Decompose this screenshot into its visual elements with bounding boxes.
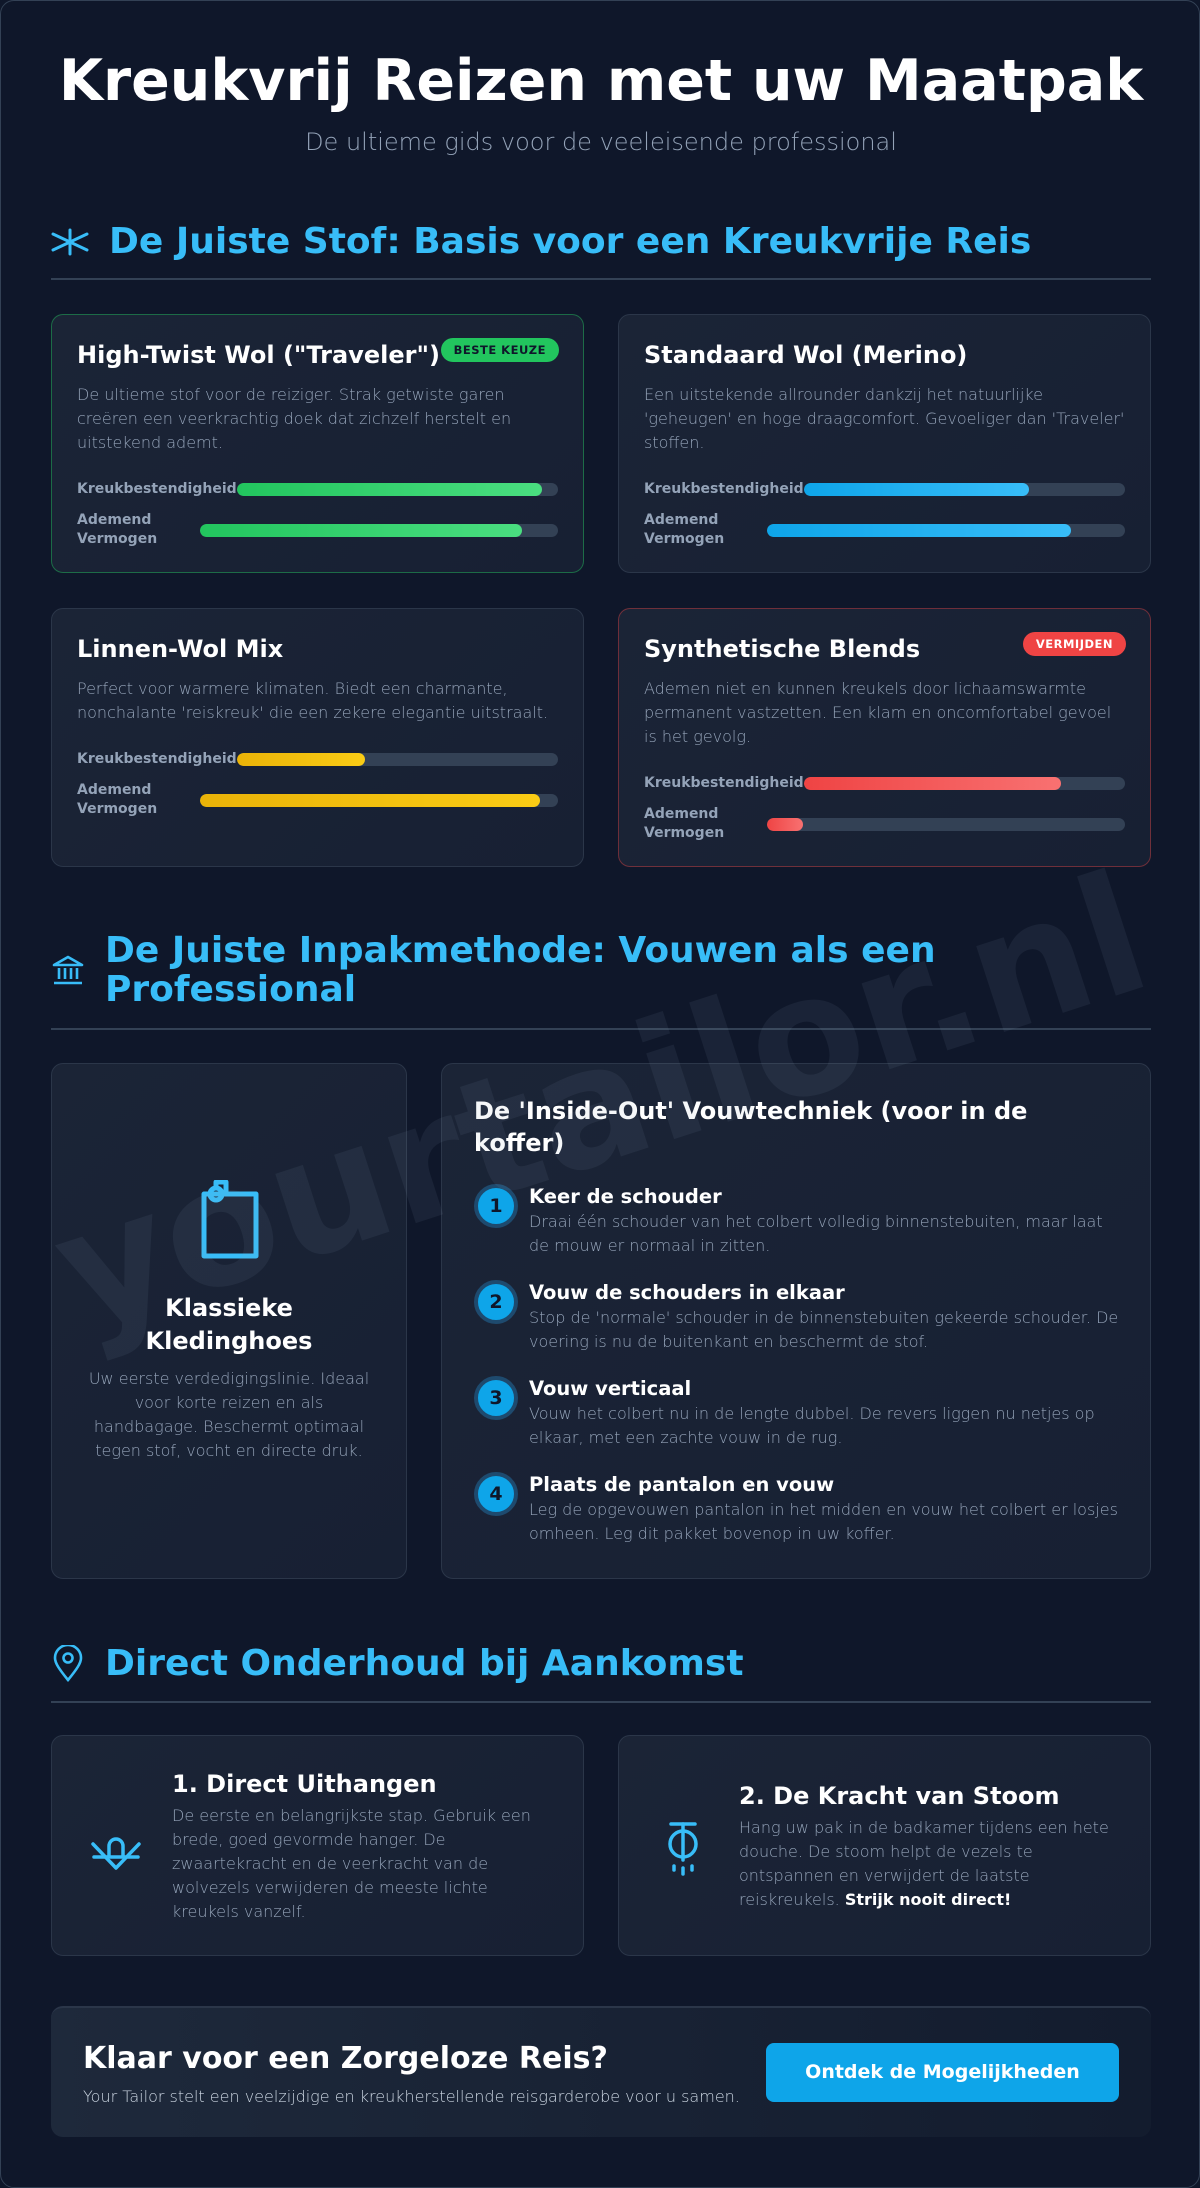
panel text [89, 1369, 369, 1460]
card title: 2. De Kracht van Stoom [739, 1782, 1060, 1810]
step 3: Vouw verticaal [529, 1377, 691, 1400]
card: hang up [51, 1735, 584, 1956]
panel title: De 'Inside-Out' Vouwtechniek (voor in de koffer) [474, 1097, 1027, 1157]
bar chart: Ademend Vermogen [77, 782, 157, 817]
card text: Ademen niet en kunnen kreukels door lichaamswarmte permanent vastzetten. Een klam en oncomfortabel gevoel is het gevolg. [644, 679, 1111, 746]
bar chart: Kreukbestendigheid [644, 775, 804, 791]
CTA banner [51, 2006, 1151, 2137]
panel text: tegen stof, vocht en directe druk. [95, 1441, 363, 1460]
section heading: arrival: Direct Onderhoud bij Aankomst [105, 1643, 744, 1684]
watermark: yourtailor.nl [34, 837, 1168, 1369]
step 3: Vouw het colbert nu in de lengte dubbel. De revers liggen nu netjes op [529, 1404, 1095, 1423]
title: Kreukvrij Reizen met uw Maatpak [59, 48, 1143, 114]
card title: High-Twist Wol ("Traveler") [77, 341, 440, 369]
bar chart [77, 751, 558, 817]
card: linen-wool [51, 608, 584, 867]
card text: Hang uw pak in de badkamer tijdens een hete douche. De stoom helpt de vezels te ontspannen en verwijdert de laatste reiskreukels. Strijk nooit direct! [739, 1818, 1109, 1909]
step 1: de mouw er normaal in zitten. [529, 1236, 770, 1255]
step 2: Vouw de schouders in elkaar [529, 1281, 845, 1304]
badge: vermijden [1023, 632, 1126, 656]
panel: inside-out technique [441, 1063, 1151, 1579]
step 2 [474, 1280, 1118, 1351]
section heading: packing [52, 930, 936, 1010]
bar chart [77, 481, 558, 547]
card title: Standaard Wol (Merino) [644, 341, 967, 369]
card: steam [618, 1735, 1151, 1956]
section heading: packing: De Juiste Inpakmethode: Vouwen als een [105, 930, 936, 971]
badge: beste keuze [441, 338, 559, 362]
subtitle: De ultieme gids voor de veeleisende professional [305, 128, 897, 156]
step 3: elkaar, met een zachte vouw in de rug. [529, 1428, 842, 1447]
step 2: 2 [489, 1291, 503, 1313]
card text: Een uitstekende allrounder dankzij het natuurlijke 'geheugen' en hoge draagcomfort. Gevoeliger dan 'Traveler' stoffen. [644, 385, 1124, 452]
CTA button: Ontdek de Mogelijkheden [805, 2061, 1080, 2083]
card: standard wool [618, 314, 1151, 573]
step 1 [474, 1184, 1103, 1255]
step 1: Draai één schouder van het colbert volledig binnenstebuiten, maar laat [529, 1212, 1103, 1231]
section heading: fabric: De Juiste Stof: Basis voor een Kreukvrije Reis [109, 221, 1031, 262]
card title: 1. Direct Uithangen [172, 1770, 437, 1798]
bar chart [644, 481, 1125, 547]
icon: hanger [91, 1837, 141, 1870]
step 4: Plaats de pantalon en vouw [529, 1473, 834, 1496]
card: synthetic [618, 608, 1151, 867]
panel title: Kledinghoes [146, 1327, 312, 1355]
card: high-twist wool [51, 314, 584, 573]
step 1: Keer de schouder [529, 1185, 722, 1208]
CTA title: Klaar voor een Zorgeloze Reis? [83, 2041, 608, 2076]
bar chart: Kreukbestendigheid [77, 481, 237, 497]
bar chart [644, 775, 1125, 841]
step 4: 4 [489, 1483, 503, 1505]
CTA text: Your Tailor stelt een veelzijdige en kreukherstellende reisgarderobe voor u samen. [83, 2087, 740, 2106]
step 1: 1 [489, 1195, 503, 1217]
bar chart: Ademend Vermogen [644, 806, 724, 841]
step 3: 3 [489, 1387, 503, 1409]
panel text: handbagage. Beschermt optimaal [94, 1417, 364, 1436]
panel title: Klassieke [165, 1294, 293, 1322]
panel title [146, 1294, 312, 1355]
badge: vermijden: VERMIJDEN [1036, 637, 1113, 651]
card text: De ultieme stof voor de reiziger. Strak getwiste garen creëren een veerkrachtig doek dat zichzelf herstelt en uitstekend ademt. [77, 385, 511, 452]
CTA button [766, 2043, 1119, 2102]
card text: Perfect voor warmere klimaten. Biedt een charmante, nonchalante 'reiskreuk' die een zekere elegantie uitstraalt. [77, 679, 548, 722]
panel text: voor korte reizen en als [135, 1393, 323, 1412]
bar chart: Kreukbestendigheid [77, 751, 237, 767]
panel: garment bag [51, 1063, 407, 1579]
step 4 [474, 1472, 1118, 1543]
card title: Linnen-Wol Mix [77, 635, 283, 663]
card title: Synthetische Blends [644, 635, 920, 663]
step 3 [474, 1376, 1095, 1447]
bar chart: Ademend Vermogen [644, 512, 724, 547]
step 2: Stop de 'normale' schouder in de binnenstebuiten gekeerde schouder. De [529, 1308, 1118, 1327]
section heading: packing: Professional [105, 969, 356, 1010]
badge: beste keuze: BESTE KEUZE [454, 343, 546, 357]
bar chart: Kreukbestendigheid [644, 481, 804, 497]
bar chart: Ademend Vermogen [77, 512, 157, 547]
icon: shower steam [668, 1822, 698, 1876]
step 2: voering is nu de buitenkant en beschermt de stof. [529, 1332, 928, 1351]
card text: De eerste en belangrijkste stap. Gebruik een brede, goed gevormde hanger. De zwaartekracht en de veerkracht van de wolvezels verwijderen de meeste lichte kreukels vanzelf. [172, 1806, 531, 1921]
icon: garment bag [202, 1180, 258, 1258]
step 4: omheen. Leg dit pakket bovenop in uw koffer. [529, 1524, 895, 1543]
step 4: Leg de opgevouwen pantalon in het midden en vouw het colbert er losjes [529, 1500, 1118, 1519]
panel text: Uw eerste verdedigingslinie. Ideaal [89, 1369, 369, 1388]
